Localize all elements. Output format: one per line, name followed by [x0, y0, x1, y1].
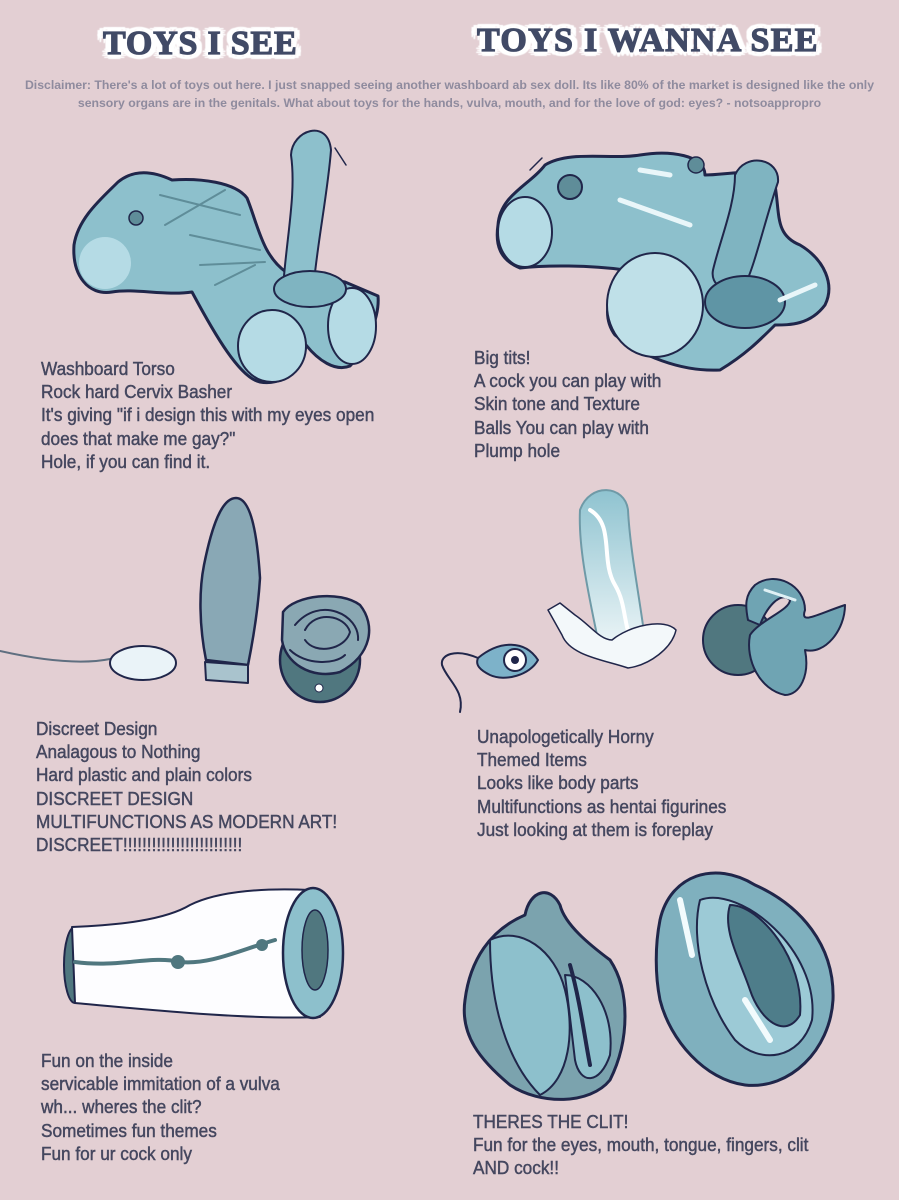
caption: fun on the inside: wh... wheres the clit? — [41, 1097, 202, 1117]
caption: fun on the inside: Sometimes fun themes — [41, 1121, 217, 1141]
caption: washboard torso: Rock hard Cervix Basher — [41, 382, 232, 402]
caption: big tits — [474, 348, 661, 462]
disclaimer text — [25, 78, 874, 110]
caption: discreet design: Discreet Design — [36, 719, 157, 739]
heading: toys I see: TOYS I SEE — [103, 25, 297, 62]
caption: big tits: Balls You can play with — [474, 418, 649, 438]
caption: unapologetically horny: Multifunctions as hentai figurines — [477, 797, 726, 817]
illustration: plain sleeve toy — [64, 888, 343, 1018]
caption: theres the clit: Fun for the eyes, mouth, tongue, fingers, clit — [473, 1135, 808, 1155]
caption: unapologetically horny: Looks like body parts — [477, 773, 638, 793]
illustration: realistic sculpted sleeve — [464, 893, 625, 1099]
caption: washboard torso — [40, 359, 374, 472]
illustration: plain egg with wire — [0, 646, 176, 680]
caption: unapologetically horny: Themed Items — [477, 750, 587, 770]
heading: toys I wanna see: TOYS I WANNA SEE — [477, 22, 819, 59]
caption: fun on the inside — [40, 1051, 280, 1164]
caption: discreet design: DISCREET DESIGN — [36, 789, 193, 809]
caption: washboard torso: does that make me gay?" — [41, 429, 235, 449]
caption: washboard torso: It's giving "if i design this with my eyes open — [41, 405, 374, 425]
caption: washboard torso: Washboard Torso — [41, 359, 175, 379]
caption: theres the clit: THERES THE CLIT! — [473, 1112, 628, 1132]
caption: discreet design: DISCREET!!!!!!!!!!!!!!!!!!!!!!!!! — [36, 835, 242, 855]
caption: theres the clit — [472, 1112, 808, 1178]
caption: big tits: Plump hole — [474, 441, 560, 461]
illustration: round glossy sleeve — [656, 873, 833, 1085]
illustration: tentacle ring toy — [703, 579, 845, 695]
disclaimer text: Disclaimer: There's a lot of toys out here. I just snapped seeing another washboard ab sex doll. Its like 80% of the market is designed like the only — [25, 78, 874, 92]
illustration: gradient figurine toy — [548, 490, 676, 668]
caption: discreet design — [36, 719, 337, 855]
illustration: rose toy — [280, 596, 369, 702]
caption: big tits: A cock you can play with — [474, 371, 661, 391]
caption: fun on the inside: Fun on the inside — [41, 1051, 173, 1071]
caption: theres the clit: AND cock!! — [473, 1158, 559, 1178]
caption: unapologetically horny — [477, 727, 726, 840]
caption: unapologetically horny: Just looking at them is foreplay — [477, 820, 713, 840]
caption: discreet design: Hard plastic and plain colors — [36, 765, 252, 785]
illustration: eyeball egg with tail — [442, 645, 538, 712]
caption: big tits: Big tits! — [474, 348, 530, 368]
caption: unapologetically horny: Unapologetically Horny — [477, 727, 654, 747]
illustration: realistic torso toy — [74, 131, 378, 383]
caption: discreet design: MULTIFUNCTIONS AS MODERN ART! — [36, 812, 337, 832]
caption: discreet design: Analagous to Nothing — [36, 742, 200, 762]
caption: fun on the inside: Fun for ur cock only — [41, 1144, 192, 1164]
disclaimer text: sensory organs are in the genitals. What about toys for the hands, vulva, mouth, and for the love of god: eyes? - notsoappropro — [78, 96, 821, 110]
caption: fun on the inside: servicable immitation of a vulva — [41, 1074, 280, 1094]
illustration: plain bullet bottle — [200, 498, 260, 683]
illustration: fantasy torso toy — [497, 153, 829, 370]
caption: washboard torso: Hole, if you can find it. — [41, 452, 210, 472]
caption: big tits: Skin tone and Texture — [474, 394, 640, 414]
